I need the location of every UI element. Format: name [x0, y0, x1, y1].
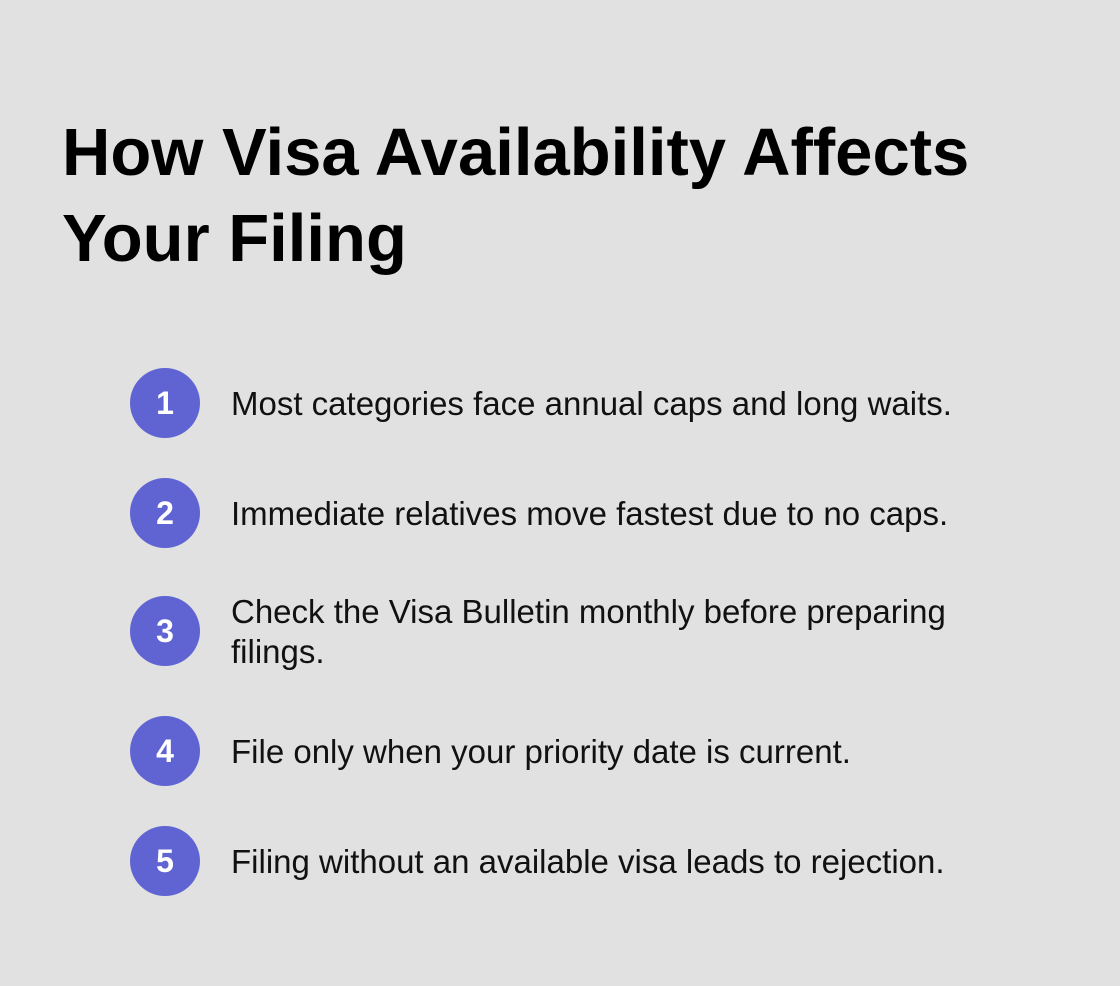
- circle 5: [130, 826, 200, 896]
- item 5: [130, 826, 945, 896]
- text 3: Check the Visa Bulletin monthly before preparing filings.: [231, 593, 946, 670]
- item 3: [130, 593, 946, 670]
- item 2: [130, 478, 948, 548]
- title: How Visa Availability Affects: [62, 115, 969, 190]
- circle 5: 5: [156, 843, 174, 879]
- text 1: Most categories face annual caps and long waits.: [231, 385, 952, 422]
- title: Your Filing: [62, 201, 407, 276]
- text 4: File only when your priority date is current.: [231, 733, 851, 770]
- text 5: Filing without an available visa leads to rejection.: [231, 843, 945, 880]
- circle 4: [130, 716, 200, 786]
- circle 3: [130, 596, 200, 666]
- circle 1: 1: [156, 385, 174, 421]
- title: [62, 115, 969, 276]
- item 4: [130, 716, 851, 786]
- circle 1: [130, 368, 200, 438]
- circle 2: [130, 478, 200, 548]
- text 2: Immediate relatives move fastest due to no caps.: [231, 495, 948, 532]
- circle 4: 4: [156, 733, 174, 769]
- circle 3: 3: [156, 613, 174, 649]
- item 1: [130, 368, 952, 438]
- circle 2: 2: [156, 495, 174, 531]
